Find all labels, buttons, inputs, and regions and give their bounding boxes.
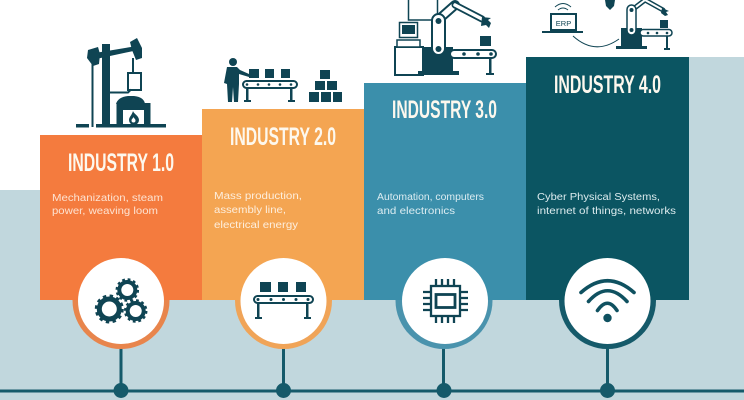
icon: ERP laptop and connected robot: ERP: [556, 19, 571, 28]
icon: ERP laptop and connected robot: [542, 0, 672, 50]
panel: Industry 3.0: [364, 83, 526, 300]
icon: worker and assembly line: [224, 58, 342, 102]
heading: Industry 1.0: INDUSTRY 1.0: [68, 149, 174, 177]
text: Industry 4.0 description: internet of things, networks: [537, 206, 676, 217]
heading: Industry 4.0: INDUSTRY 4.0: [554, 71, 661, 99]
text: Industry 2.0 description: assembly line,: [214, 205, 286, 216]
text: Industry 1.0 description: Mechanization, steam: [52, 193, 163, 204]
icon: wifi badge: [559, 252, 656, 349]
text: Industry 3.0 description: and electronics: [377, 206, 455, 217]
icon: computer and robot arm: [395, 0, 496, 75]
icon: steam pump and furnace: [76, 38, 166, 128]
text: Industry 1.0 description: power, weaving loom: [52, 206, 158, 217]
text: Industry 4.0 description: Cyber Physical Systems,: [537, 192, 660, 203]
timeline: [0, 340, 744, 398]
icon: conveyor badge: [235, 252, 332, 349]
panel: Industry 2.0: [202, 109, 364, 300]
text: Industry 2.0 description: electrical energy: [214, 220, 298, 231]
text: Industry 2.0 description: Mass production,: [214, 191, 302, 202]
heading: Industry 2.0: INDUSTRY 2.0: [230, 123, 336, 151]
icon: chip badge: [396, 252, 492, 349]
icon: gears badge: [72, 252, 170, 349]
text: Industry 3.0 description: Automation, computers: [377, 192, 484, 203]
heading: Industry 3.0: INDUSTRY 3.0: [392, 96, 497, 124]
panel: Industry 1.0: [40, 135, 202, 300]
panel: Industry 4.0: [526, 57, 689, 300]
